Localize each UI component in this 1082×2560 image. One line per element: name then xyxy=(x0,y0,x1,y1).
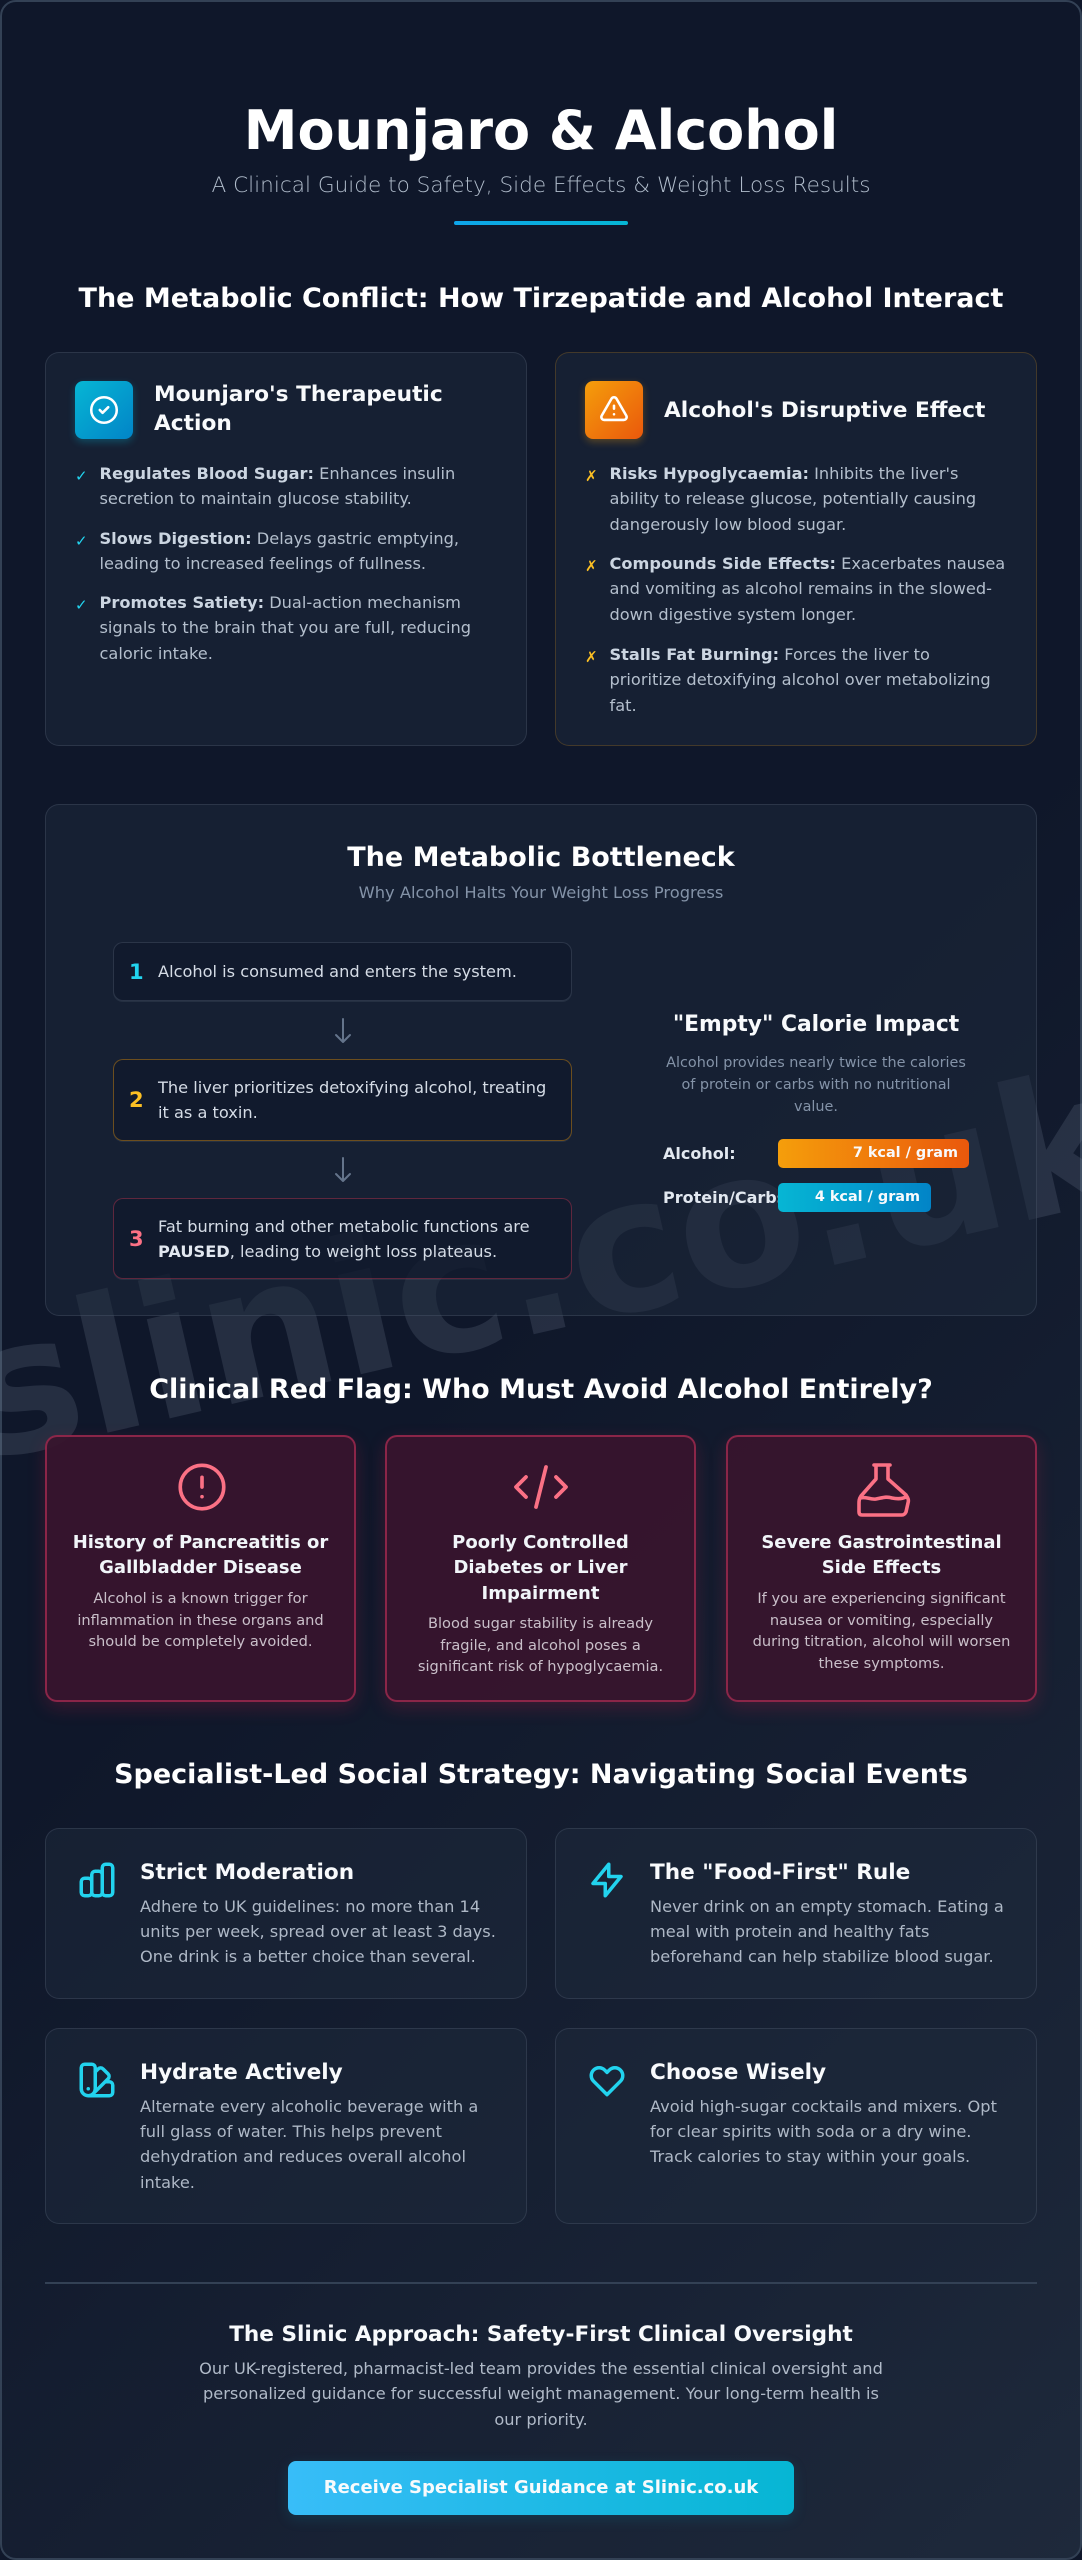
card text: Alternate every alcoholic beverage with a xyxy=(140,2097,478,2116)
benefit: satiety: ✓ xyxy=(75,596,88,614)
arrow 2 xyxy=(335,1157,351,1182)
card title: Severe Gastrointestinal xyxy=(761,1532,1002,1553)
benefit: blood sugar: secretion to maintain glucose stability. xyxy=(100,489,412,508)
card text: Track calories to stay within your goals. xyxy=(650,2147,970,2166)
card title: Diabetes or Liver xyxy=(453,1557,628,1578)
step 3: PAUSED, leading to weight loss plateaus. xyxy=(158,1242,497,1261)
subtitle: A Clinical Guide to Safety, Side Effects & Weight Loss Results xyxy=(211,173,871,198)
chart label: alcohol: Alcohol: xyxy=(663,1144,736,1163)
card text: should be completely avoided. xyxy=(88,1633,313,1650)
chart bar: alcohol 7 kcal xyxy=(778,1139,969,1168)
benefit: satiety: signals to the brain that you are full, reducing xyxy=(100,618,471,637)
card: choose wisely xyxy=(555,2028,1037,2224)
card text xyxy=(140,2097,478,2192)
step 2: The liver prioritizes detoxifying alcohol, treating xyxy=(158,1078,546,1097)
icon: check circle xyxy=(75,381,133,439)
step 1 xyxy=(113,942,572,1001)
bottleneck subtitle: Why Alcohol Halts Your Weight Loss Progress xyxy=(359,883,723,902)
panel: metabolic bottleneck xyxy=(45,804,1037,1316)
benefit: satiety: caloric intake. xyxy=(100,644,213,663)
card title: History of Pancreatitis or xyxy=(73,1532,328,1553)
card title xyxy=(452,1532,629,1604)
card text: units per week, spread over at least 3 days. xyxy=(140,1922,496,1941)
risk: fat burning xyxy=(585,645,991,715)
benefit: digestion: Slows Digestion: Delays gastric emptying, xyxy=(100,529,459,548)
calorie impact description xyxy=(666,1055,966,1115)
calorie impact description: value. xyxy=(794,1099,838,1115)
panel heading: Action xyxy=(154,411,232,436)
icon: exclamation circle xyxy=(178,1464,226,1511)
card title: Poorly Controlled xyxy=(452,1532,629,1553)
icon: code xyxy=(514,1465,568,1509)
benefit: digestion xyxy=(75,529,459,573)
icon: swatch xyxy=(80,2062,114,2098)
heading: metabolic conflict: The Metabolic Conflict: How Tirzepatide and Alcohol Interact xyxy=(79,283,1003,314)
card text: If you are experiencing significant xyxy=(757,1590,1006,1607)
card text xyxy=(418,1615,663,1675)
card title: Gallbladder Disease xyxy=(99,1557,302,1578)
card: pancreatitis xyxy=(45,1435,356,1702)
card title: The "Food-First" Rule xyxy=(650,1860,910,1885)
heading: red flag: Clinical Red Flag: Who Must Avoid Alcohol Entirely? xyxy=(149,1374,933,1405)
calorie impact heading: "Empty" Calorie Impact xyxy=(673,1012,959,1037)
calorie impact description: of protein or carbs with no nutritional xyxy=(681,1077,951,1093)
bottleneck heading: The Metabolic Bottleneck xyxy=(347,842,735,873)
panel: Mounjaro's action xyxy=(45,352,527,746)
risk: side effects: Compounds Side Effects: Exacerbates nausea xyxy=(610,554,1005,573)
risk: hypoglycaemia: ✗ xyxy=(585,467,598,485)
card text: Avoid high-sugar cocktails and mixers. Opt xyxy=(650,2097,997,2116)
benefit: digestion: leading to increased feelings of fullness. xyxy=(100,554,426,573)
panel heading: Mounjaro's Therapeutic xyxy=(154,382,443,407)
panel: Alcohol's effect xyxy=(555,352,1037,746)
card: gastrointestinal xyxy=(726,1435,1037,1702)
heading: social strategy: Specialist-Led Social Strategy: Navigating Social Events xyxy=(114,1759,968,1790)
benefit: blood sugar: ✓ xyxy=(75,467,88,485)
benefit: blood sugar xyxy=(75,464,455,508)
risk: fat burning: Stalls Fat Burning: Forces the liver to xyxy=(610,645,930,664)
icon: warning triangle xyxy=(585,381,643,439)
chart label: protein/carbs: Protein/Carbs: xyxy=(663,1188,793,1207)
card title: Choose Wisely xyxy=(650,2060,826,2085)
risk: fat burning: prioritize detoxifying alcohol over metabolizing xyxy=(610,670,991,689)
card text: for clear spirits with soda or a dry wine. xyxy=(650,2122,971,2141)
card text: fragile, and alcohol poses a xyxy=(440,1637,641,1654)
card text: One drink is a better choice than several. xyxy=(140,1947,476,1966)
step 1: 1 xyxy=(129,960,144,984)
risk: hypoglycaemia: ability to release glucose, potentially causing xyxy=(610,489,976,508)
card title xyxy=(761,1532,1002,1578)
card text xyxy=(650,1897,1004,1966)
title: Mounjaro & Alcohol xyxy=(244,99,838,162)
panel heading: Alcohol's Disruptive Effect xyxy=(664,398,985,423)
chart bar: protein 4 kcal xyxy=(778,1183,931,1212)
card: strict moderation xyxy=(45,1828,527,1999)
risk: side effects: and vomiting as alcohol remains in the slowed- xyxy=(610,579,992,598)
card text: beforehand can help stabilize blood sugar. xyxy=(650,1947,994,1966)
step 2 xyxy=(113,1059,572,1141)
risk: side effects xyxy=(585,554,1005,624)
card text xyxy=(140,1897,496,1966)
card text: Never drink on an empty stomach. Eating a xyxy=(650,1897,1004,1916)
footer text: personalized guidance for successful weight management. Your long-term health is xyxy=(203,2384,879,2403)
card title: Strict Moderation xyxy=(140,1860,354,1885)
card title: Side Effects xyxy=(822,1557,941,1578)
card text xyxy=(753,1590,1010,1672)
card text: inflammation in these organs and xyxy=(77,1612,324,1629)
card text: intake. xyxy=(140,2173,195,2192)
footer heading: The Slinic Approach: Safety-First Clinical Oversight xyxy=(229,2322,853,2347)
card title xyxy=(73,1532,328,1578)
card text: Blood sugar stability is already xyxy=(428,1615,653,1632)
benefit: digestion: ✓ xyxy=(75,532,88,550)
call to action button: Receive Specialist Guidance at Slinic.co.uk xyxy=(324,2477,758,2498)
card text xyxy=(650,2097,997,2166)
icon: lightning bolt xyxy=(591,1862,623,1898)
card text: Adhere to UK guidelines: no more than 14 xyxy=(140,1897,480,1916)
risk: side effects: ✗ xyxy=(585,557,598,575)
icon: bar chart xyxy=(80,1862,114,1898)
risk: fat burning: ✗ xyxy=(585,648,598,666)
title accent line xyxy=(454,221,628,225)
card text: nausea or vomiting, especially xyxy=(770,1612,993,1629)
step 1: Alcohol is consumed and enters the system. xyxy=(158,962,517,981)
benefit: blood sugar: Regulates Blood Sugar: Enhances insulin xyxy=(100,464,455,483)
footer text: our priority. xyxy=(494,2410,588,2429)
card: diabetes xyxy=(385,1435,696,1702)
panel heading xyxy=(154,382,443,436)
footer text: Our UK-registered, pharmacist-led team provides the essential clinical oversight and xyxy=(199,2359,883,2378)
step 3: Fat burning and other metabolic functions are xyxy=(158,1217,530,1236)
chart bar: alcohol 7 kcal: 7 kcal / gram xyxy=(853,1145,958,1161)
card text: these symptoms. xyxy=(818,1655,944,1672)
card text: during titration, alcohol will worsen xyxy=(753,1633,1010,1650)
card text xyxy=(77,1590,324,1650)
step 3 xyxy=(113,1198,572,1279)
call to action button xyxy=(288,2461,794,2515)
risk: hypoglycaemia: dangerously low blood sugar. xyxy=(610,515,846,534)
arrow 1 xyxy=(335,1018,351,1043)
benefit: satiety: Promotes Satiety: Dual-action mechanism xyxy=(100,593,461,612)
risk: fat burning: fat. xyxy=(610,696,637,715)
card text: full glass of water. This helps prevent xyxy=(140,2122,442,2141)
footer text xyxy=(199,2359,883,2429)
calorie impact description: Alcohol provides nearly twice the calories xyxy=(666,1055,966,1071)
icon: heart xyxy=(590,2066,624,2096)
card text: Alcohol is a known trigger for xyxy=(93,1590,308,1607)
risk: hypoglycaemia xyxy=(585,464,976,534)
card: hydrate xyxy=(45,2028,527,2224)
card title: Hydrate Actively xyxy=(140,2060,343,2085)
step 2: 2 xyxy=(129,1088,144,1112)
risk: hypoglycaemia: Risks Hypoglycaemia: Inhibits the liver's xyxy=(610,464,958,483)
step 3: 3 xyxy=(129,1227,144,1251)
card text: meal with protein and healthy fats xyxy=(650,1922,929,1941)
card text: dehydration and reduces overall alcohol xyxy=(140,2147,466,2166)
card: food first xyxy=(555,1828,1037,1999)
step 2: it as a toxin. xyxy=(158,1103,258,1122)
chart bar: protein 4 kcal: 4 kcal / gram xyxy=(815,1189,920,1205)
icon: flask xyxy=(857,1463,910,1517)
card text: significant risk of hypoglycaemia. xyxy=(418,1658,663,1675)
risk: side effects: down digestive system longer. xyxy=(610,605,856,624)
card title: Impairment xyxy=(482,1583,599,1604)
benefit: satiety xyxy=(75,593,471,663)
